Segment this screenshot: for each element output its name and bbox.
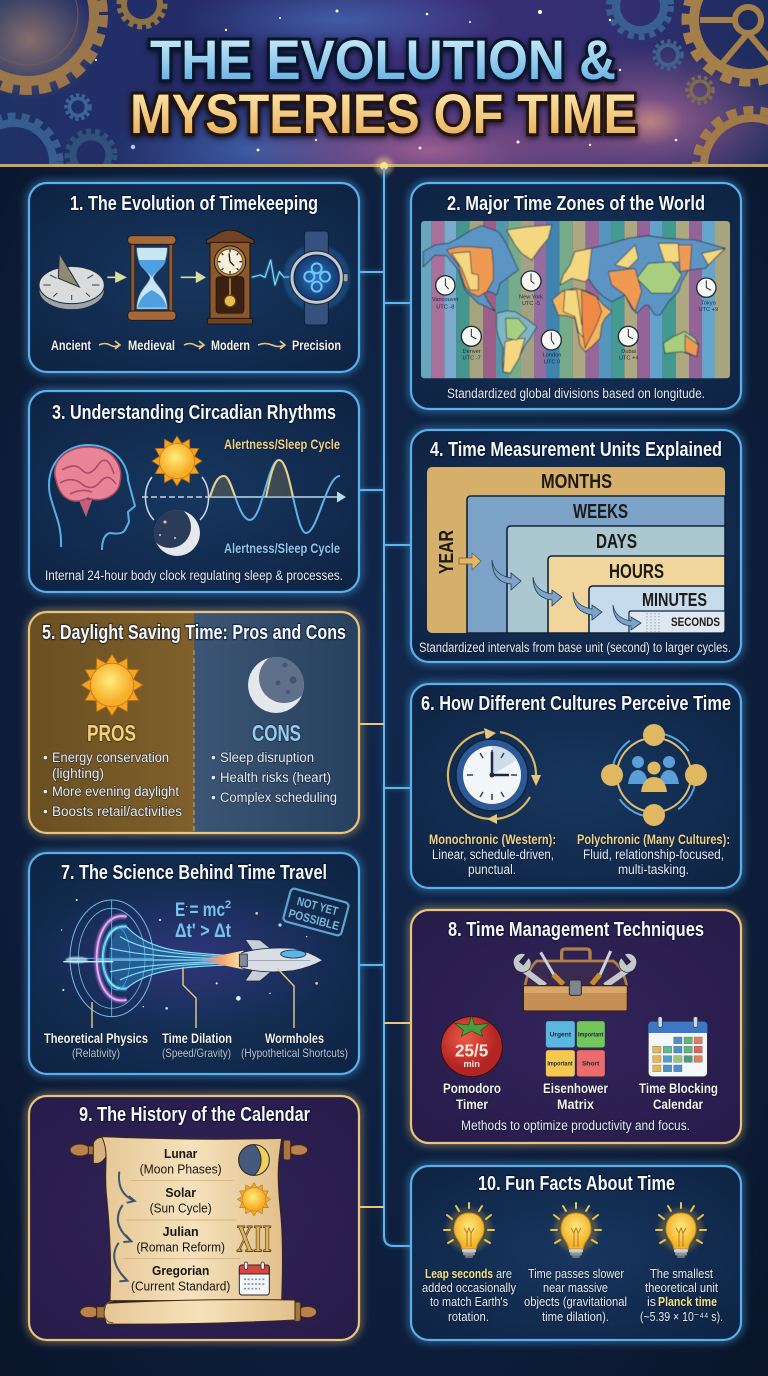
box: days xyxy=(507,526,725,633)
polychronic text: Fluid, relationship-focused, xyxy=(583,847,724,862)
icon: monochronic clock xyxy=(448,728,541,824)
calendar row: julian xyxy=(136,1224,225,1254)
flow arrows xyxy=(114,1172,135,1281)
wormhole xyxy=(63,900,243,1017)
arrow: sundial to hourglass xyxy=(107,273,125,282)
icon: moon xyxy=(248,657,304,713)
title: MYSTERIES OF TIME xyxy=(130,82,637,145)
icon: eisenhower matrix: Important xyxy=(578,1031,604,1038)
panel 4: time measurement units xyxy=(411,430,741,662)
cons column: CONS xyxy=(252,720,301,746)
icon: moon xyxy=(154,510,200,556)
icon: head silhouette xyxy=(49,445,135,550)
panel 7: science of time travel xyxy=(27,853,359,1074)
stamp: not yet possible: POSSIBLE xyxy=(287,906,341,933)
spaceship xyxy=(239,939,323,981)
clock captions: UTC 0 xyxy=(544,359,560,365)
pros column: Energy conservation xyxy=(52,750,169,765)
pros column: More evening daylight xyxy=(52,784,179,799)
icon: toolbox xyxy=(513,949,637,1011)
stars xyxy=(95,10,677,151)
callout lines xyxy=(92,967,294,1028)
fact 3: theoretical unit xyxy=(645,1280,718,1295)
fact 3 xyxy=(640,1266,723,1324)
timekeeping icon row xyxy=(39,230,350,325)
timeline labels: Modern xyxy=(211,338,250,353)
equations: Δt' > Δt xyxy=(175,921,232,942)
icon: sundial xyxy=(39,253,104,310)
gear: top left large gold xyxy=(0,0,103,90)
clock captions: Tokyo xyxy=(701,300,716,306)
calendar row: julian: Julian xyxy=(163,1224,199,1239)
label: theoretical physics: Theoretical Physics xyxy=(44,1031,148,1046)
icon: calendar xyxy=(239,1262,269,1295)
icon: sun xyxy=(237,1183,271,1216)
icon: eisenhower matrix xyxy=(546,1021,605,1077)
panel 9: history of the calendar xyxy=(29,1096,359,1340)
gear: small gold right xyxy=(687,77,713,103)
technique labels xyxy=(443,1081,718,1112)
unit labels: YEAR xyxy=(436,530,458,574)
heading: panel 9: 9. The History of the Calendar xyxy=(79,1104,310,1126)
fact 3: is xyxy=(647,1294,656,1309)
fact 1: are xyxy=(496,1266,512,1281)
nested units diagram xyxy=(427,467,725,633)
pros half xyxy=(29,612,194,833)
calendar row: lunar: Lunar xyxy=(164,1146,197,1161)
continents xyxy=(423,225,725,373)
box: seconds xyxy=(629,611,725,633)
label: time dilation: Time Dilation xyxy=(162,1031,232,1046)
icon: roman numeral xii: XII xyxy=(236,1219,272,1261)
monochronic text xyxy=(429,832,556,877)
box: weeks xyxy=(467,496,725,633)
heading: panel 1: 1. The Evolution of Timekeeping xyxy=(70,193,318,215)
unit labels: SECONDS xyxy=(671,615,720,629)
header banner xyxy=(0,0,768,164)
technique labels: Pomodoro xyxy=(443,1081,501,1096)
gear: top right blue xyxy=(609,0,671,37)
fact 2: objects (gravitational xyxy=(524,1294,627,1309)
cons column: • xyxy=(211,750,216,765)
pros column: • xyxy=(43,750,48,765)
fact 1 xyxy=(422,1266,516,1324)
fact 1: rotation. xyxy=(448,1309,489,1324)
icon: precision watch xyxy=(283,231,350,325)
calendar row: gregorian: (Current Standard) xyxy=(131,1280,230,1294)
label: theoretical physics xyxy=(44,1031,148,1060)
heading: panel 3: 3. Understanding Circadian Rhythms xyxy=(52,402,336,424)
time zone clocks xyxy=(436,271,716,350)
heading: panel 5: 5. Daylight Saving Time: Pros and Cons xyxy=(42,622,346,644)
monochronic text: Monochronic (Western): xyxy=(429,832,556,847)
icon: pomodoro tomato: min xyxy=(463,1059,480,1069)
icon: light bulb 1 xyxy=(444,1203,494,1258)
calendar row: lunar xyxy=(140,1146,222,1176)
label: wormholes: Wormholes xyxy=(265,1031,324,1046)
fact 3: The smallest xyxy=(650,1266,713,1281)
fact 2: Time passes slower xyxy=(528,1266,625,1281)
engine flame xyxy=(197,951,243,969)
title xyxy=(130,28,637,145)
clock captions: Dubai xyxy=(621,349,636,355)
cons column: • xyxy=(211,790,216,805)
clock captions xyxy=(432,294,718,365)
calendar row: lunar: (Moon Phases) xyxy=(140,1162,222,1176)
icon: hourglass xyxy=(128,236,176,320)
monochronic text: punctual. xyxy=(468,862,516,877)
icon: eisenhower matrix: Urgent xyxy=(550,1031,572,1038)
calendar row: julian: (Roman Reform) xyxy=(136,1240,225,1254)
fact 2 xyxy=(524,1266,627,1324)
icon: grandfather clock xyxy=(207,230,254,324)
clock captions: UTC -8 xyxy=(436,305,454,311)
pros column: • xyxy=(43,804,48,819)
heading: panel 7: 7. The Science Behind Time Travel xyxy=(61,862,327,884)
timeline connectors xyxy=(359,168,411,1246)
clock captions: London xyxy=(543,352,561,358)
unit labels: WEEKS xyxy=(573,501,628,523)
technique labels: Eisenhower xyxy=(543,1081,609,1096)
icon: eisenhower matrix: Important xyxy=(547,1060,573,1067)
polychronic text: Polychronic (Many Cultures): xyxy=(577,832,730,847)
icon: sun xyxy=(81,654,143,716)
space illustration xyxy=(27,880,353,1033)
cons column: Health risks (heart) xyxy=(220,770,331,785)
unit labels: MONTHS xyxy=(541,471,612,493)
parchment scroll xyxy=(70,1137,317,1324)
calendar row: solar: (Sun Cycle) xyxy=(150,1202,212,1216)
clock captions: UTC +4 xyxy=(619,356,638,362)
clock captions: UTC +9 xyxy=(699,307,718,313)
stamp: not yet possible: NOT YET xyxy=(295,894,340,919)
technique labels: Timer xyxy=(456,1097,489,1112)
heading: panel 8: 8. Time Management Techniques xyxy=(448,919,704,941)
rhythm chart xyxy=(142,460,345,533)
icon: cycle arcs xyxy=(145,477,209,520)
gear: top gold small xyxy=(119,0,165,27)
fact 3: (~5.39 × 10⁻⁴⁴ s). xyxy=(640,1309,723,1324)
equations xyxy=(175,899,232,942)
panel 5 border xyxy=(29,612,359,833)
calendar row: gregorian: Gregorian xyxy=(152,1263,209,1278)
equations: E = mc xyxy=(175,900,225,921)
cons half xyxy=(194,612,359,833)
icon: pomodoro tomato: 25/5 xyxy=(455,1041,489,1061)
cons column: • xyxy=(211,770,216,785)
panel 1: evolution of timekeeping xyxy=(29,183,359,372)
equations: 2 xyxy=(225,899,231,911)
label: time dilation: (Speed/Gravity) xyxy=(162,1046,231,1060)
arrow: hourglass to clock xyxy=(181,273,204,282)
timeline labels: Ancient xyxy=(51,338,91,353)
icon: time blocking calendar xyxy=(648,1017,707,1077)
fact 1: added occasionally xyxy=(422,1280,516,1295)
icon: light bulb 3 xyxy=(656,1203,706,1258)
gear: bottom left blue xyxy=(0,112,64,164)
unit labels: DAYS xyxy=(596,531,637,553)
panel 5: daylight saving time xyxy=(29,612,359,833)
cons column xyxy=(211,720,337,805)
calendar row: solar xyxy=(150,1185,212,1216)
unit labels: HOURS xyxy=(609,561,664,583)
clock captions: New York xyxy=(519,294,543,300)
header divider xyxy=(0,157,768,175)
caption: panel 8: Methods to optimize productivity and focus. xyxy=(461,1118,690,1133)
label: time dilation xyxy=(162,1031,232,1060)
pros column: • xyxy=(43,784,48,799)
panel 3: circadian rhythms xyxy=(29,391,359,592)
caption: panel 2: Standardized global divisions based on longitude. xyxy=(447,386,705,401)
box: minutes xyxy=(589,586,725,633)
box: months xyxy=(427,467,725,633)
clock captions: UTC -7 xyxy=(463,356,481,362)
icon: eisenhower matrix: Short xyxy=(582,1060,600,1067)
clock captions: UTC -5 xyxy=(522,301,540,307)
pros column: Boosts retail/activities xyxy=(52,804,182,819)
box: hours xyxy=(548,556,725,633)
unit labels: MINUTES xyxy=(642,590,707,610)
timeline labels xyxy=(51,338,341,353)
polychronic text: multi-tasking. xyxy=(618,862,689,877)
heading: panel 2: 2. Major Time Zones of the World xyxy=(447,193,705,215)
icon: polychronic community xyxy=(601,724,707,826)
pros column: PROS xyxy=(87,720,136,746)
calendar row: solar: Solar xyxy=(165,1185,196,1200)
cons column: Sleep disruption xyxy=(220,750,314,765)
timeline labels: Medieval xyxy=(128,338,175,353)
pros column xyxy=(43,720,182,819)
gear: small blue right xyxy=(654,41,682,69)
caption: panel 3: Internal 24-hour body clock regulating sleep & processes. xyxy=(45,568,343,583)
label: wormholes xyxy=(241,1031,348,1060)
fact 1: to match Earth's xyxy=(430,1294,508,1309)
gear: small blue xyxy=(66,95,90,119)
timeline labels: Precision xyxy=(292,338,341,353)
gear: top right large gold xyxy=(686,0,768,82)
panel 6: cultures and time xyxy=(411,684,741,888)
icon: pulse line xyxy=(252,260,291,285)
fact 2: time dilation). xyxy=(542,1309,609,1324)
clock captions: Vancouver xyxy=(432,297,459,303)
gear: bottom right gold xyxy=(692,106,768,164)
label: wormholes: (Hypothetical Shortcuts) xyxy=(241,1046,348,1060)
icon: moon xyxy=(239,1145,269,1175)
cons column: Complex scheduling xyxy=(220,790,337,805)
chart label: top: Alertness/Sleep Cycle xyxy=(224,437,340,452)
technique labels: Time Blocking xyxy=(639,1081,718,1096)
icon: pomodoro tomato xyxy=(441,1016,502,1077)
icon: brain xyxy=(55,447,121,517)
technique labels: Calendar xyxy=(653,1097,704,1112)
clock captions: Denver xyxy=(463,349,481,355)
monochronic text: Linear, schedule-driven, xyxy=(432,847,554,862)
chart label: bottom: Alertness/Sleep Cycle xyxy=(224,541,340,556)
label: theoretical physics: (Relativity) xyxy=(72,1046,120,1060)
panel 10: fun facts xyxy=(411,1166,741,1340)
polychronic text xyxy=(577,832,730,877)
gear: lower blue xyxy=(64,128,118,164)
calendar row: gregorian xyxy=(131,1263,230,1294)
flow arrows xyxy=(459,553,641,630)
fact 3: Planck time xyxy=(658,1294,717,1309)
title: THE EVOLUTION & xyxy=(150,28,616,91)
panel 8: time management techniques xyxy=(411,910,741,1143)
stamp: not yet possible xyxy=(283,888,349,936)
icon: light bulb 2 xyxy=(551,1203,601,1258)
fact 2: near massive xyxy=(543,1280,608,1295)
world time zone map xyxy=(421,221,730,378)
unit labels xyxy=(436,471,720,629)
pros column: (lighting) xyxy=(52,766,104,781)
icon: sun xyxy=(152,436,202,486)
panel 2: major time zones xyxy=(411,183,741,409)
technique labels: Matrix xyxy=(557,1097,594,1112)
heading: panel 10: 10. Fun Facts About Time xyxy=(478,1173,675,1195)
fact 1: Leap seconds xyxy=(425,1266,493,1281)
